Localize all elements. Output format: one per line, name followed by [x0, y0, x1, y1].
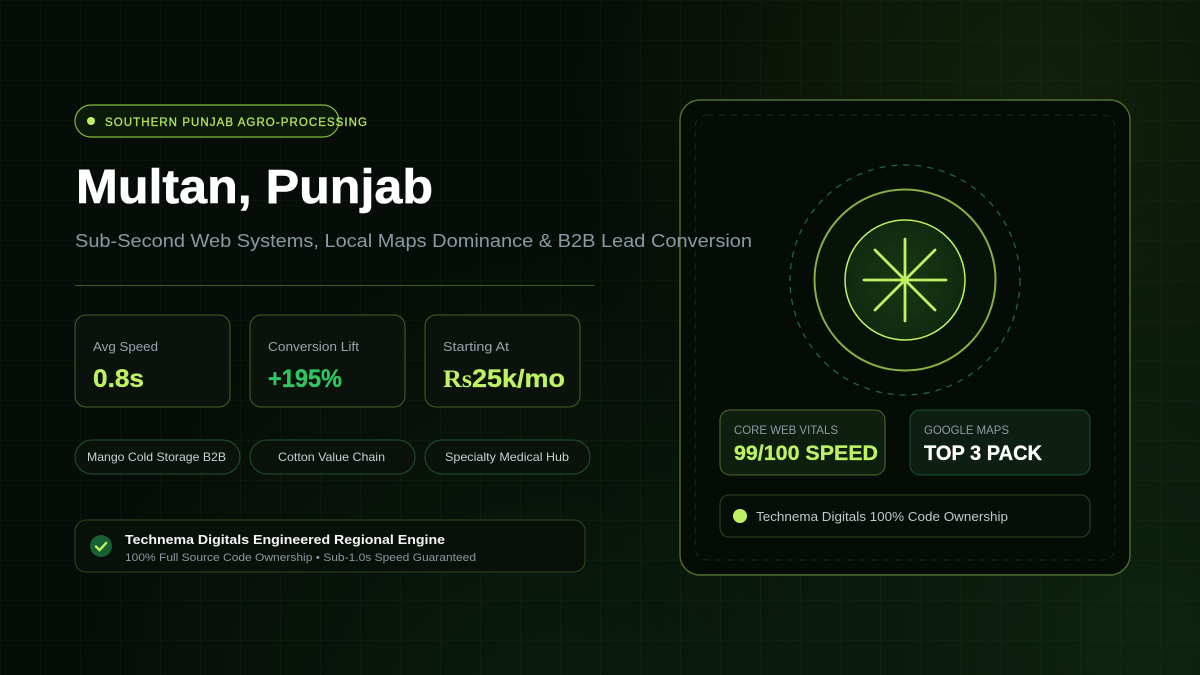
- chip: cotton value chain: [250, 440, 415, 474]
- badge: southern punjab agro-processing: SOUTHERN PUNJAB AGRO-PROCESSING: [105, 117, 367, 129]
- stat card: conversion lift: +195%: [268, 365, 342, 393]
- panel: right visual: [680, 100, 1130, 575]
- icon: check: [90, 535, 112, 557]
- badge: southern punjab agro-processing: [75, 105, 367, 137]
- chip: cotton value chain: Cotton Value Chain: [278, 450, 385, 464]
- chip: specialty medical hub: Specialty Medical Hub: [445, 450, 569, 464]
- chip: mango cold storage: Mango Cold Storage B2B: [87, 450, 226, 464]
- chip: mango cold storage: [75, 440, 240, 474]
- stat card: conversion lift: Conversion Lift: [268, 339, 359, 354]
- stat card: starting at: Starting At: [443, 339, 509, 354]
- card: core web vitals: 99/100 SPEED: [734, 442, 878, 465]
- guarantee banner: 100% Full Source Code Ownership • Sub-1.0s Speed Guaranteed: [125, 552, 476, 564]
- stat card: conversion lift: [250, 315, 405, 407]
- card: google maps: TOP 3 PACK: [924, 442, 1042, 465]
- stat card: starting at: [425, 315, 580, 407]
- card: google maps: [910, 410, 1090, 475]
- stat card: avg speed: Avg Speed: [93, 339, 158, 354]
- status bar: code ownership: [720, 495, 1090, 537]
- icon: eight-point star: [864, 239, 946, 321]
- guarantee banner: [75, 520, 585, 572]
- title: Multan, Punjab: [76, 161, 433, 214]
- card: google maps: GOOGLE MAPS: [924, 423, 1009, 437]
- subtitle: Sub-Second Web Systems, Local Maps Dominance & B2B Lead Conversion: [75, 231, 752, 251]
- stat card: avg speed: [75, 315, 230, 407]
- guarantee banner: Technema Digitals Engineered Regional Engine: [125, 532, 445, 547]
- stat card: starting at: 25k/mo: [472, 365, 565, 393]
- card: core web vitals: CORE WEB VITALS: [734, 423, 838, 437]
- stat card: avg speed: 0.8s: [93, 365, 144, 393]
- stat card: starting at: Rs: [443, 366, 472, 393]
- status bar: code ownership: Technema Digitals 100% Code Ownership: [756, 509, 1008, 524]
- card: core web vitals: [720, 410, 885, 475]
- emblem: concentric circles with star: [790, 165, 1020, 395]
- chip: specialty medical hub: [425, 440, 590, 474]
